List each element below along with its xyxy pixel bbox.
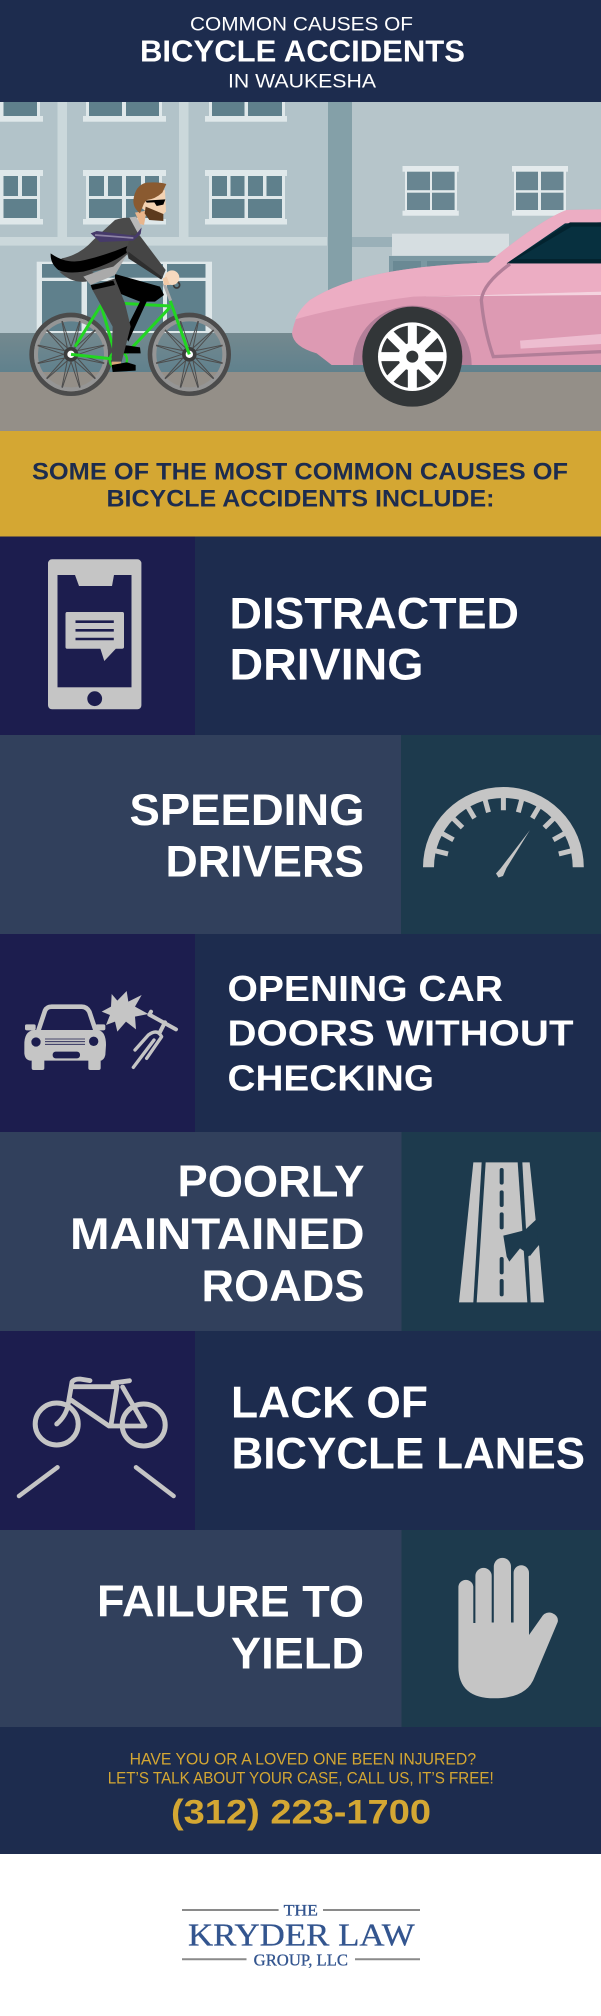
heading: distracted driving: DRIVING bbox=[230, 641, 424, 690]
title line: common causes of: COMMON CAUSES OF bbox=[190, 15, 413, 36]
icon: speedometer bbox=[423, 787, 584, 878]
left building bbox=[0, 102, 330, 333]
street scene illustration bbox=[0, 102, 601, 431]
heading: poorly maintained roads: MAINTAINED bbox=[70, 1210, 364, 1259]
heading: speeding drivers: DRIVERS bbox=[166, 838, 364, 887]
right building bbox=[352, 102, 601, 333]
logo: the kryder law group: GROUP, LLC bbox=[254, 1950, 348, 1969]
cta line 2: LET’S TALK ABOUT YOUR CASE, CALL US, IT’S FREE! bbox=[108, 1768, 494, 1787]
pink car bbox=[292, 209, 601, 407]
heading: speeding drivers bbox=[130, 786, 364, 887]
title line: in waukesha: IN WAUKESHA bbox=[228, 72, 376, 93]
heading: failure to yield: YIELD bbox=[231, 1630, 364, 1679]
phone number: (312) 223-1700 bbox=[171, 1794, 431, 1832]
heading: poorly maintained roads: ROADS bbox=[202, 1262, 364, 1311]
heading: lack of bicycle lanes bbox=[231, 1378, 585, 1479]
sidewalk bbox=[0, 333, 601, 372]
pillar bbox=[328, 102, 352, 333]
icon: raised hand bbox=[458, 1558, 558, 1698]
heading: opening car doors without checking: CHECKING bbox=[228, 1057, 434, 1098]
heading: opening car doors without checking: OPENING CAR bbox=[228, 968, 503, 1009]
heading: distracted driving: DISTRACTED bbox=[230, 589, 519, 638]
heading: failure to yield bbox=[97, 1578, 364, 1679]
logo: the kryder law group: KRYDER LAW bbox=[188, 1916, 416, 1952]
banner text line 1: SOME OF THE MOST COMMON CAUSES OF bbox=[32, 458, 568, 486]
bicycle bbox=[32, 282, 229, 394]
icon: smartphone with message bbox=[48, 559, 141, 709]
road bbox=[0, 372, 601, 431]
panel: poorly maintained roads bbox=[0, 1132, 601, 1331]
heading: distracted driving bbox=[230, 589, 519, 690]
heading: poorly maintained roads bbox=[70, 1158, 364, 1311]
heading: speeding drivers: SPEEDING bbox=[130, 786, 364, 835]
cyclist bbox=[32, 182, 229, 394]
panel: failure to yield bbox=[0, 1530, 601, 1727]
icon: bicycle between lane lines bbox=[19, 1379, 174, 1496]
panel: distracted driving bbox=[0, 536, 601, 735]
heading: lack of bicycle lanes: LACK OF bbox=[231, 1378, 428, 1427]
panel: speeding drivers bbox=[0, 735, 601, 934]
car wheel bbox=[362, 307, 462, 407]
panel: opening car doors bbox=[0, 934, 601, 1132]
logo: the kryder law group bbox=[182, 1903, 420, 1969]
header band bbox=[0, 0, 601, 102]
logo: the kryder law group: THE bbox=[284, 1903, 318, 1920]
icon: damaged road bbox=[459, 1162, 544, 1302]
icon: car hitting bicycle bbox=[24, 991, 176, 1070]
heading: opening car doors without checking bbox=[228, 968, 574, 1098]
heading: opening car doors without checking: DOORS WITHOUT bbox=[228, 1013, 574, 1054]
call to action band bbox=[0, 1727, 601, 1854]
gold banner bbox=[0, 431, 601, 536]
banner text line 2: BICYCLE ACCIDENTS INCLUDE: bbox=[106, 486, 494, 513]
heading: poorly maintained roads: POORLY bbox=[178, 1158, 364, 1207]
title line: bicycle accidents: BICYCLE ACCIDENTS bbox=[140, 35, 465, 69]
heading: failure to yield: FAILURE TO bbox=[97, 1578, 364, 1627]
panel: lack of bicycle lanes bbox=[0, 1331, 601, 1530]
heading: lack of bicycle lanes: BICYCLE LANES bbox=[232, 1430, 585, 1479]
cta line 1: HAVE YOU OR A LOVED ONE BEEN INJURED? bbox=[130, 1749, 476, 1768]
rider bbox=[51, 182, 179, 372]
